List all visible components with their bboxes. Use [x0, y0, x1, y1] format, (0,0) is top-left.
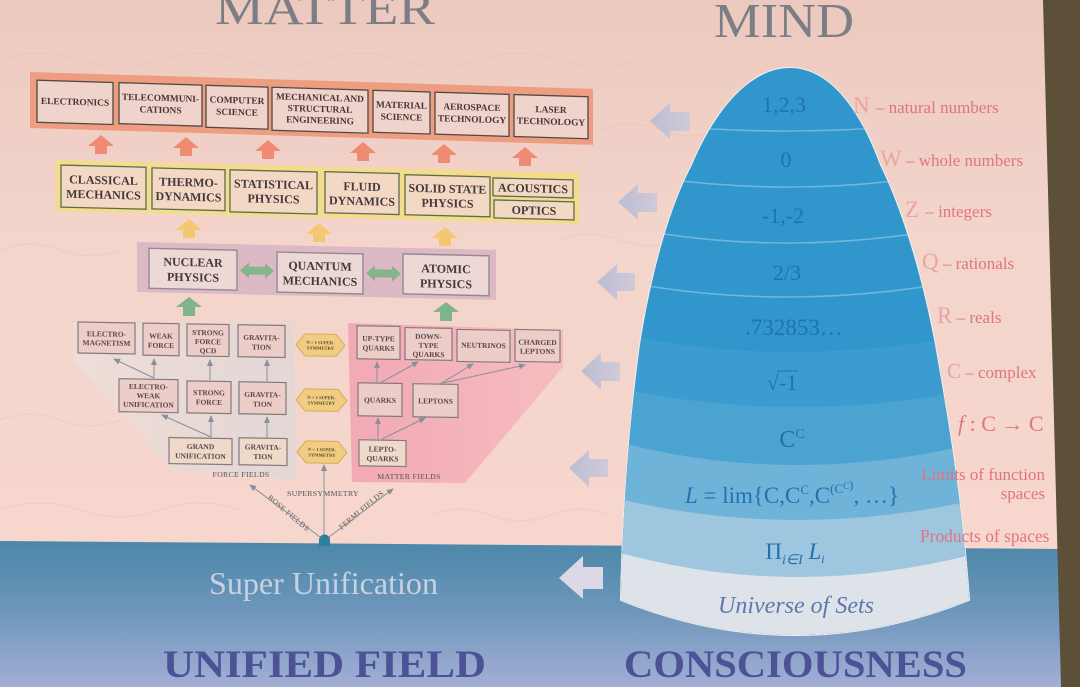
heading: consciousness: CONSCIOUSNESS: [624, 643, 967, 686]
box: quantum mechanics: QUANTUM: [288, 258, 352, 274]
badge: supersymmetry 1: [296, 334, 345, 357]
box: neutrinos: NEUTRINOS: [461, 341, 506, 350]
box: gravitation 2: GRAVITA-: [244, 390, 281, 399]
box: gravitation 3: TION: [253, 452, 273, 461]
box: gravitation 3: GRAVITA-: [245, 442, 281, 452]
box: computer science: [206, 85, 268, 129]
box: nuclear physics: PHYSICS: [167, 270, 219, 285]
box: up-type quarks: QUARKS: [362, 343, 395, 353]
label: rationals: Q – rationals: [922, 249, 1014, 274]
box: charged leptons: CHARGED: [518, 337, 557, 347]
label: reals: R – reals: [937, 303, 1001, 328]
box: classical mechanics: MECHANICS: [66, 187, 141, 203]
box: strong force: STRONG: [193, 388, 225, 397]
box: electromagnetism: [78, 322, 135, 354]
panel: matter fields: [348, 323, 563, 483]
frame edge: [1043, 0, 1080, 687]
box: down-type quarks: [405, 328, 452, 360]
label: whole numbers: W – whole numbers: [880, 146, 1023, 171]
box: material science: SCIENCE: [381, 113, 422, 124]
box: statistical physics: [230, 170, 317, 214]
arrows: foundations to disciplines: [176, 219, 458, 246]
box: electroweak unification: ELECTRO-: [129, 382, 168, 392]
box: neutrinos: [457, 329, 510, 362]
box: acoustics: [493, 178, 573, 198]
label: fermi fields: FERMI FIELDS: [337, 489, 386, 531]
box: atomic physics: [403, 254, 489, 296]
box: fluid dynamics: FLUID: [343, 179, 381, 194]
arrow: double green left: [240, 262, 274, 279]
box: laser technology: LASER: [535, 105, 567, 116]
level: limit: C: [800, 482, 809, 497]
box: strong force: [187, 381, 231, 414]
floor: blue unified field: [0, 541, 1062, 687]
arrow: double green right: [366, 265, 401, 282]
level: limit: (C: [830, 481, 843, 496]
label: super unification: Super Unification: [209, 565, 438, 601]
level: limit: C: [843, 481, 849, 491]
box: laser technology: TECHNOLOGY: [517, 117, 585, 129]
box: charged leptons: [515, 329, 560, 362]
box: leptons: [413, 384, 458, 417]
arrows: physics to technology: [88, 135, 538, 166]
badge: supersymmetry 3: N = 1 SUPER-: [308, 447, 336, 452]
box: optics: OPTICS: [512, 203, 557, 218]
box: up-type quarks: [357, 326, 400, 359]
box: strong force qcd: FORCE: [195, 337, 221, 346]
box: electroweak unification: UNIFICATION: [123, 400, 174, 410]
box: mechanical and structural engineering: STRUCTURAL: [288, 104, 352, 116]
level: universe of sets: Universe of Sets: [718, 593, 874, 619]
level: products: L: [803, 539, 821, 564]
box: atomic physics: ATOMIC: [421, 261, 471, 276]
box: weak force: FORCE: [148, 341, 174, 350]
level: real: .732853…: [745, 315, 843, 340]
box: electroweak unification: [119, 379, 178, 413]
box: strong force qcd: [187, 324, 229, 357]
box: statistical physics: STATISTICAL: [234, 176, 313, 192]
panel: fundamental physics: [137, 242, 496, 300]
label: supersymmetry: SUPERSYMMETRY: [287, 489, 359, 498]
label: force fields: FORCE FIELDS: [212, 470, 270, 479]
level: products: i: [821, 552, 825, 566]
box: telecommunications: [119, 83, 202, 126]
label: products of spaces: Products of spaces: [920, 526, 1050, 546]
box: down-type quarks: DOWN-: [415, 332, 442, 341]
box: mechanical and structural engineering: ENGINEERING: [286, 115, 355, 127]
box: electromagnetism: ELECTRO-: [87, 329, 126, 339]
panel: applied technologies: [30, 72, 593, 145]
badge: supersymmetry 2: [296, 389, 347, 412]
box: statistical physics: PHYSICS: [247, 191, 300, 207]
box: electronics: ELECTRONICS: [41, 97, 109, 109]
box: strong force: FORCE: [196, 398, 222, 407]
level: zero: 0: [780, 147, 792, 172]
level: products: Π: [765, 539, 782, 564]
box: solid state physics: SOLID STATE: [409, 181, 486, 197]
box: down-type quarks: TYPE: [418, 341, 439, 350]
badge: supersymmetry 3: SYMMETRY: [308, 452, 336, 458]
arrows: super unification branches: [250, 465, 393, 537]
label: matter fields: MATTER FIELDS: [377, 472, 441, 481]
box: down-type quarks: QUARKS: [412, 350, 445, 359]
box: leptoquarks: [359, 440, 406, 467]
box: up-type quarks: UP-TYPE: [362, 334, 395, 343]
label: complex: C – complex: [947, 359, 1037, 383]
box: laser technology: [514, 95, 588, 139]
box: charged leptons: LEPTONS: [520, 347, 555, 356]
level: limit: ): [849, 477, 854, 492]
box: leptoquarks: QUARKS: [366, 454, 399, 463]
level: limit: L = lim{C,C: [685, 483, 800, 508]
box: strong force qcd: STRONG: [192, 328, 224, 337]
node: super unification origin: [319, 534, 330, 546]
badge: supersymmetry 2: N = 1 SUPER-: [307, 395, 336, 400]
badge: supersymmetry 1: SYMMETRY: [307, 345, 335, 351]
box: mechanical and structural engineering: [272, 87, 368, 133]
box: gravitation 1: [238, 325, 285, 358]
box: grand unification: GRAND: [187, 442, 214, 451]
box: quarks: [358, 383, 402, 417]
box: material science: MATERIAL: [376, 100, 427, 112]
box: leptons: LEPTONS: [418, 396, 453, 406]
box: fluid dynamics: [325, 172, 399, 215]
box: weak force: [143, 323, 179, 356]
box: weak force: WEAK: [149, 331, 173, 341]
box: solid state physics: [405, 175, 490, 217]
level: negatives: -1,-2: [762, 203, 804, 228]
label: limits of function spaces: spaces: [1001, 484, 1045, 503]
level: natural numbers: 1,2,3: [762, 92, 806, 117]
box: atomic physics: PHYSICS: [420, 276, 472, 291]
tree arrows: [114, 359, 525, 439]
box: fluid dynamics: DYNAMICS: [329, 193, 395, 209]
arrows: green up: [176, 297, 459, 321]
box: grand unification: UNIFICATION: [175, 451, 226, 461]
box: gravitation 1: TION: [252, 342, 272, 352]
box: electronics: [37, 80, 113, 124]
chart: bell of mathematical structures: [620, 67, 970, 636]
box: telecommunications: CATIONS: [139, 105, 182, 117]
box: mechanical and structural engineering: MECHANICAL AND: [276, 92, 364, 105]
label: bose fields: BOSE FIELDS: [266, 493, 311, 533]
particle field boxes: [78, 321, 560, 470]
box: classical mechanics: [61, 165, 146, 209]
level: function space: C: [779, 427, 795, 453]
level: limit: ,C: [809, 483, 830, 508]
box: electromagnetism: MAGNETISM: [83, 338, 130, 348]
level: limit: , …}: [854, 483, 899, 508]
box: quantum mechanics: MECHANICS: [283, 273, 358, 289]
level: imaginary: √-1: [767, 370, 797, 395]
box: leptoquarks: LEPTO-: [369, 444, 396, 454]
level: fraction: 2/3: [773, 260, 801, 285]
box: quarks: QUARKS: [364, 395, 396, 405]
box: classical mechanics: CLASSICAL: [69, 172, 138, 188]
box: grand unification: [169, 438, 232, 465]
box: thermodynamics: [152, 168, 225, 211]
label: limits of function spaces: Limits of function: [921, 465, 1045, 484]
box: aerospace technology: [435, 92, 509, 136]
panel: physics disciplines: [56, 160, 579, 224]
box: material science: [373, 90, 430, 134]
box: telecommunications: TELECOMMUNI-: [122, 93, 199, 105]
label: integers: Z – integers: [905, 197, 992, 222]
badge: supersymmetry 1: N = 1 SUPER-: [306, 340, 335, 345]
box: acoustics: ACOUSTICS: [498, 181, 568, 196]
level: products: i∈I: [782, 553, 804, 568]
level: function space: C: [795, 427, 805, 442]
box: aerospace technology: AEROSPACE: [443, 102, 501, 114]
label: natural numbers: N – natural numbers: [853, 93, 999, 118]
box: aerospace technology: TECHNOLOGY: [438, 114, 506, 126]
box: electroweak unification: WEAK: [137, 391, 161, 400]
panel: force fields: [73, 323, 297, 480]
box: computer science: COMPUTER: [210, 95, 264, 107]
box: thermodynamics: THERMO-: [159, 175, 218, 190]
box: computer science: SCIENCE: [216, 108, 258, 119]
badge: supersymmetry 3: [297, 441, 347, 464]
badge: supersymmetry 2: SYMMETRY: [308, 400, 336, 406]
box: nuclear physics: NUCLEAR: [163, 255, 223, 270]
box: gravitation 3: [239, 438, 287, 466]
box: gravitation 2: [239, 382, 286, 415]
box: quantum mechanics: [277, 252, 363, 294]
label: function: f : C → C: [958, 411, 1044, 436]
heading: unified field: UNIFIED FIELD: [163, 643, 486, 686]
box: gravitation 2: TION: [253, 399, 273, 409]
box: gravitation 1: GRAVITA-: [243, 333, 280, 342]
box: thermodynamics: DYNAMICS: [156, 189, 222, 205]
box: optics: [494, 200, 574, 220]
arrows: mind to matter: [559, 103, 690, 599]
labels: number systems: [853, 93, 1050, 546]
box: nuclear physics: [149, 248, 237, 290]
box: solid state physics: PHYSICS: [421, 196, 474, 211]
box: strong force qcd: QCD: [200, 346, 217, 355]
